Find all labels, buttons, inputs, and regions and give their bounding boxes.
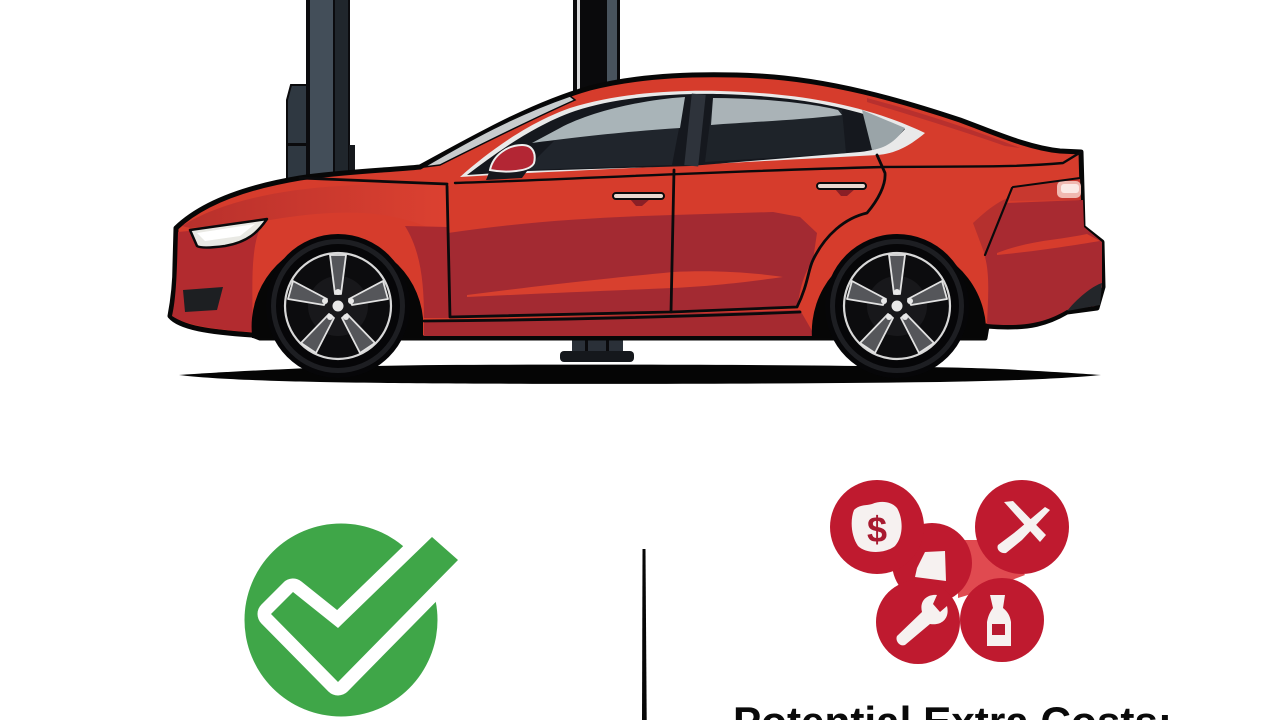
front wheel [266, 234, 410, 378]
door bright stripe [467, 271, 783, 297]
exhaust [1067, 283, 1102, 311]
headlight [190, 219, 267, 248]
window frame black [467, 94, 905, 175]
tail lamp [1010, 178, 1081, 201]
rear deck strip [867, 98, 1020, 148]
icon cluster: extra costs [830, 480, 1069, 664]
rear quarter shading [985, 200, 1102, 325]
rear wheel arch [812, 244, 986, 338]
middle circle [892, 523, 972, 603]
rear window [705, 98, 846, 162]
rear wheel [825, 234, 969, 378]
rear bright stripe [997, 234, 1100, 255]
money circle [830, 480, 924, 574]
ground shadow [179, 365, 1101, 384]
bottle circle [960, 578, 1044, 662]
divider [642, 549, 647, 720]
wrench circle [876, 580, 960, 664]
door and belt lines [300, 152, 1081, 321]
tools circle [975, 480, 1069, 574]
front window [525, 97, 685, 170]
icon: green check mark [244, 524, 458, 716]
lift: jack base under car [560, 338, 634, 362]
front wheel arch [252, 240, 423, 338]
quarter window [862, 110, 905, 150]
door pillar [684, 93, 706, 167]
rear quarter wedge shading [973, 197, 1010, 255]
door handles [613, 183, 866, 206]
side mirror [486, 145, 535, 180]
door lower panel shading [448, 212, 817, 317]
lift: right post [573, 0, 620, 100]
red car [170, 75, 1103, 378]
front bumper shading [172, 224, 262, 332]
windscreen strip [424, 96, 575, 167]
lift: left post [287, 0, 355, 180]
front fender shading [405, 226, 450, 318]
car body [170, 75, 1103, 338]
fog lamp [183, 287, 223, 312]
hood highlight [182, 183, 450, 240]
window chrome surround [460, 91, 925, 177]
money circle: $ [867, 509, 887, 550]
sill [424, 310, 815, 336]
shop rag icon [915, 551, 946, 581]
